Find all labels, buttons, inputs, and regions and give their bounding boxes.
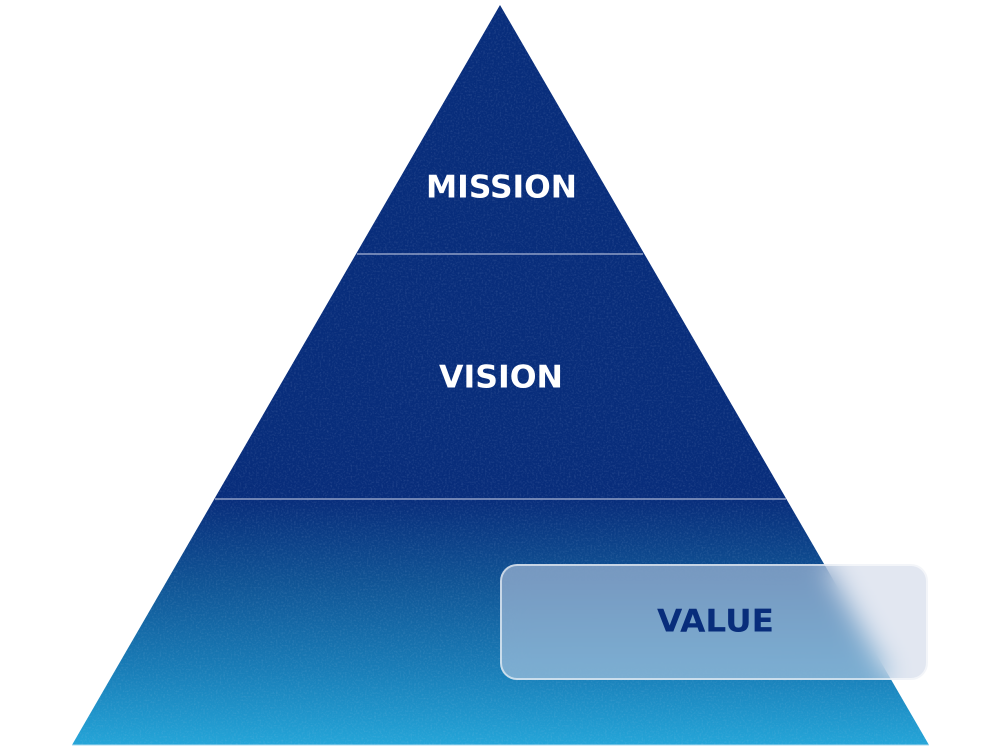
label: vision: VISION (439, 360, 563, 396)
label: value: VALUE (657, 604, 774, 640)
base edge highlight (72, 744, 929, 746)
glass card: value (500, 564, 928, 680)
divider: mission and vision (357, 253, 643, 255)
divider: vision and value (215, 498, 786, 500)
label: mission: MISSION (426, 170, 577, 206)
